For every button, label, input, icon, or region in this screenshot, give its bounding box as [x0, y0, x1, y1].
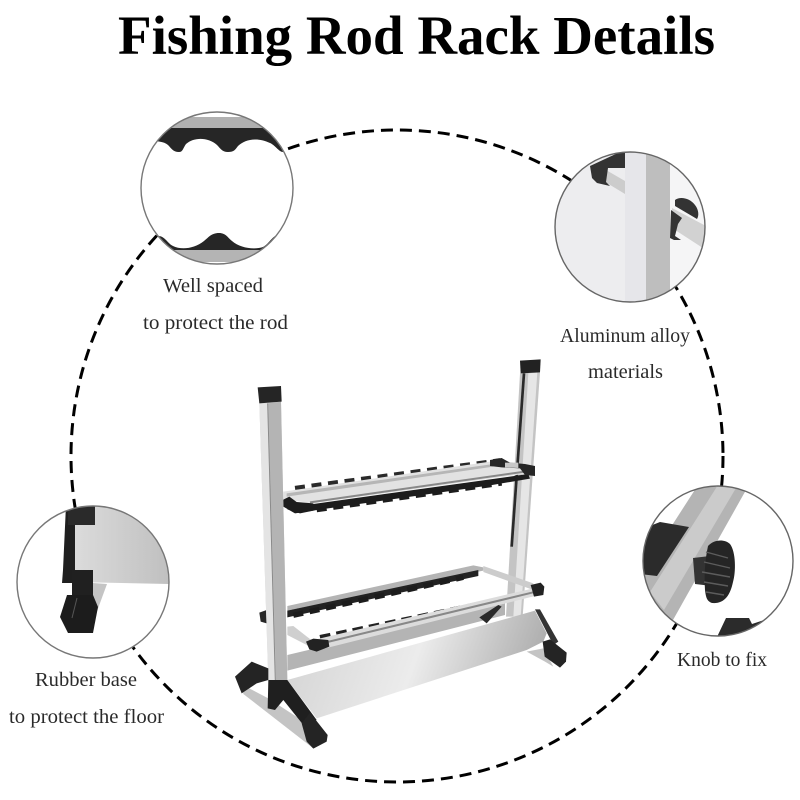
right background [670, 150, 710, 305]
label: rubber base: Rubber base [35, 669, 137, 691]
dashed ring connecting details [71, 130, 723, 782]
top black clip [68, 505, 95, 525]
label: rubber base: to protect the floor [9, 706, 164, 728]
right rail [672, 208, 704, 247]
detail circle: aluminum alloy [555, 150, 710, 305]
right black connector [670, 210, 682, 240]
detail circle: knob [640, 485, 793, 640]
lower black clip [72, 570, 93, 597]
knob grooves [702, 552, 730, 595]
fishing rod rack product illustration [235, 359, 567, 749]
label: aluminum alloy [560, 325, 690, 383]
label: aluminum alloy: Aluminum alloy [560, 325, 690, 347]
detail circle: well spaced comb [140, 112, 294, 264]
grey panel [75, 506, 168, 584]
left foot [235, 662, 328, 749]
upright post white face [625, 150, 646, 305]
bottom black comb [159, 233, 275, 250]
upper rail [606, 171, 625, 194]
right black knob [675, 198, 698, 219]
top black comb [158, 128, 283, 152]
back base bar [287, 603, 505, 671]
black bracket plate [640, 522, 689, 576]
label: aluminum alloy: materials [588, 361, 663, 383]
left post [258, 386, 287, 680]
diagonal post [640, 485, 746, 620]
front base panel [287, 611, 547, 718]
top grey rail [172, 117, 262, 128]
knurled knob [705, 540, 735, 603]
right foot [527, 609, 567, 668]
rail below panel [93, 583, 107, 611]
upper black connector [590, 152, 625, 186]
upright post grey face [646, 150, 670, 305]
right post [506, 359, 541, 617]
foot slot [72, 598, 77, 618]
knob shaft [693, 556, 706, 586]
lower shelf [259, 565, 544, 652]
black vertical upright [62, 505, 75, 583]
title: Fishing Rod Rack Details [118, 5, 715, 66]
label: well spaced [143, 275, 288, 334]
detail circle: rubber base [17, 500, 172, 658]
rubber foot [60, 595, 98, 633]
lower black bracket [718, 618, 763, 636]
upper shelf [283, 458, 535, 513]
bottom grey rail [174, 250, 260, 262]
label: rubber base [9, 669, 164, 728]
label: well spaced: to protect the rod [143, 312, 288, 334]
label: well spaced: Well spaced [163, 275, 263, 297]
label: knob to fix: Knob to fix [677, 649, 767, 671]
